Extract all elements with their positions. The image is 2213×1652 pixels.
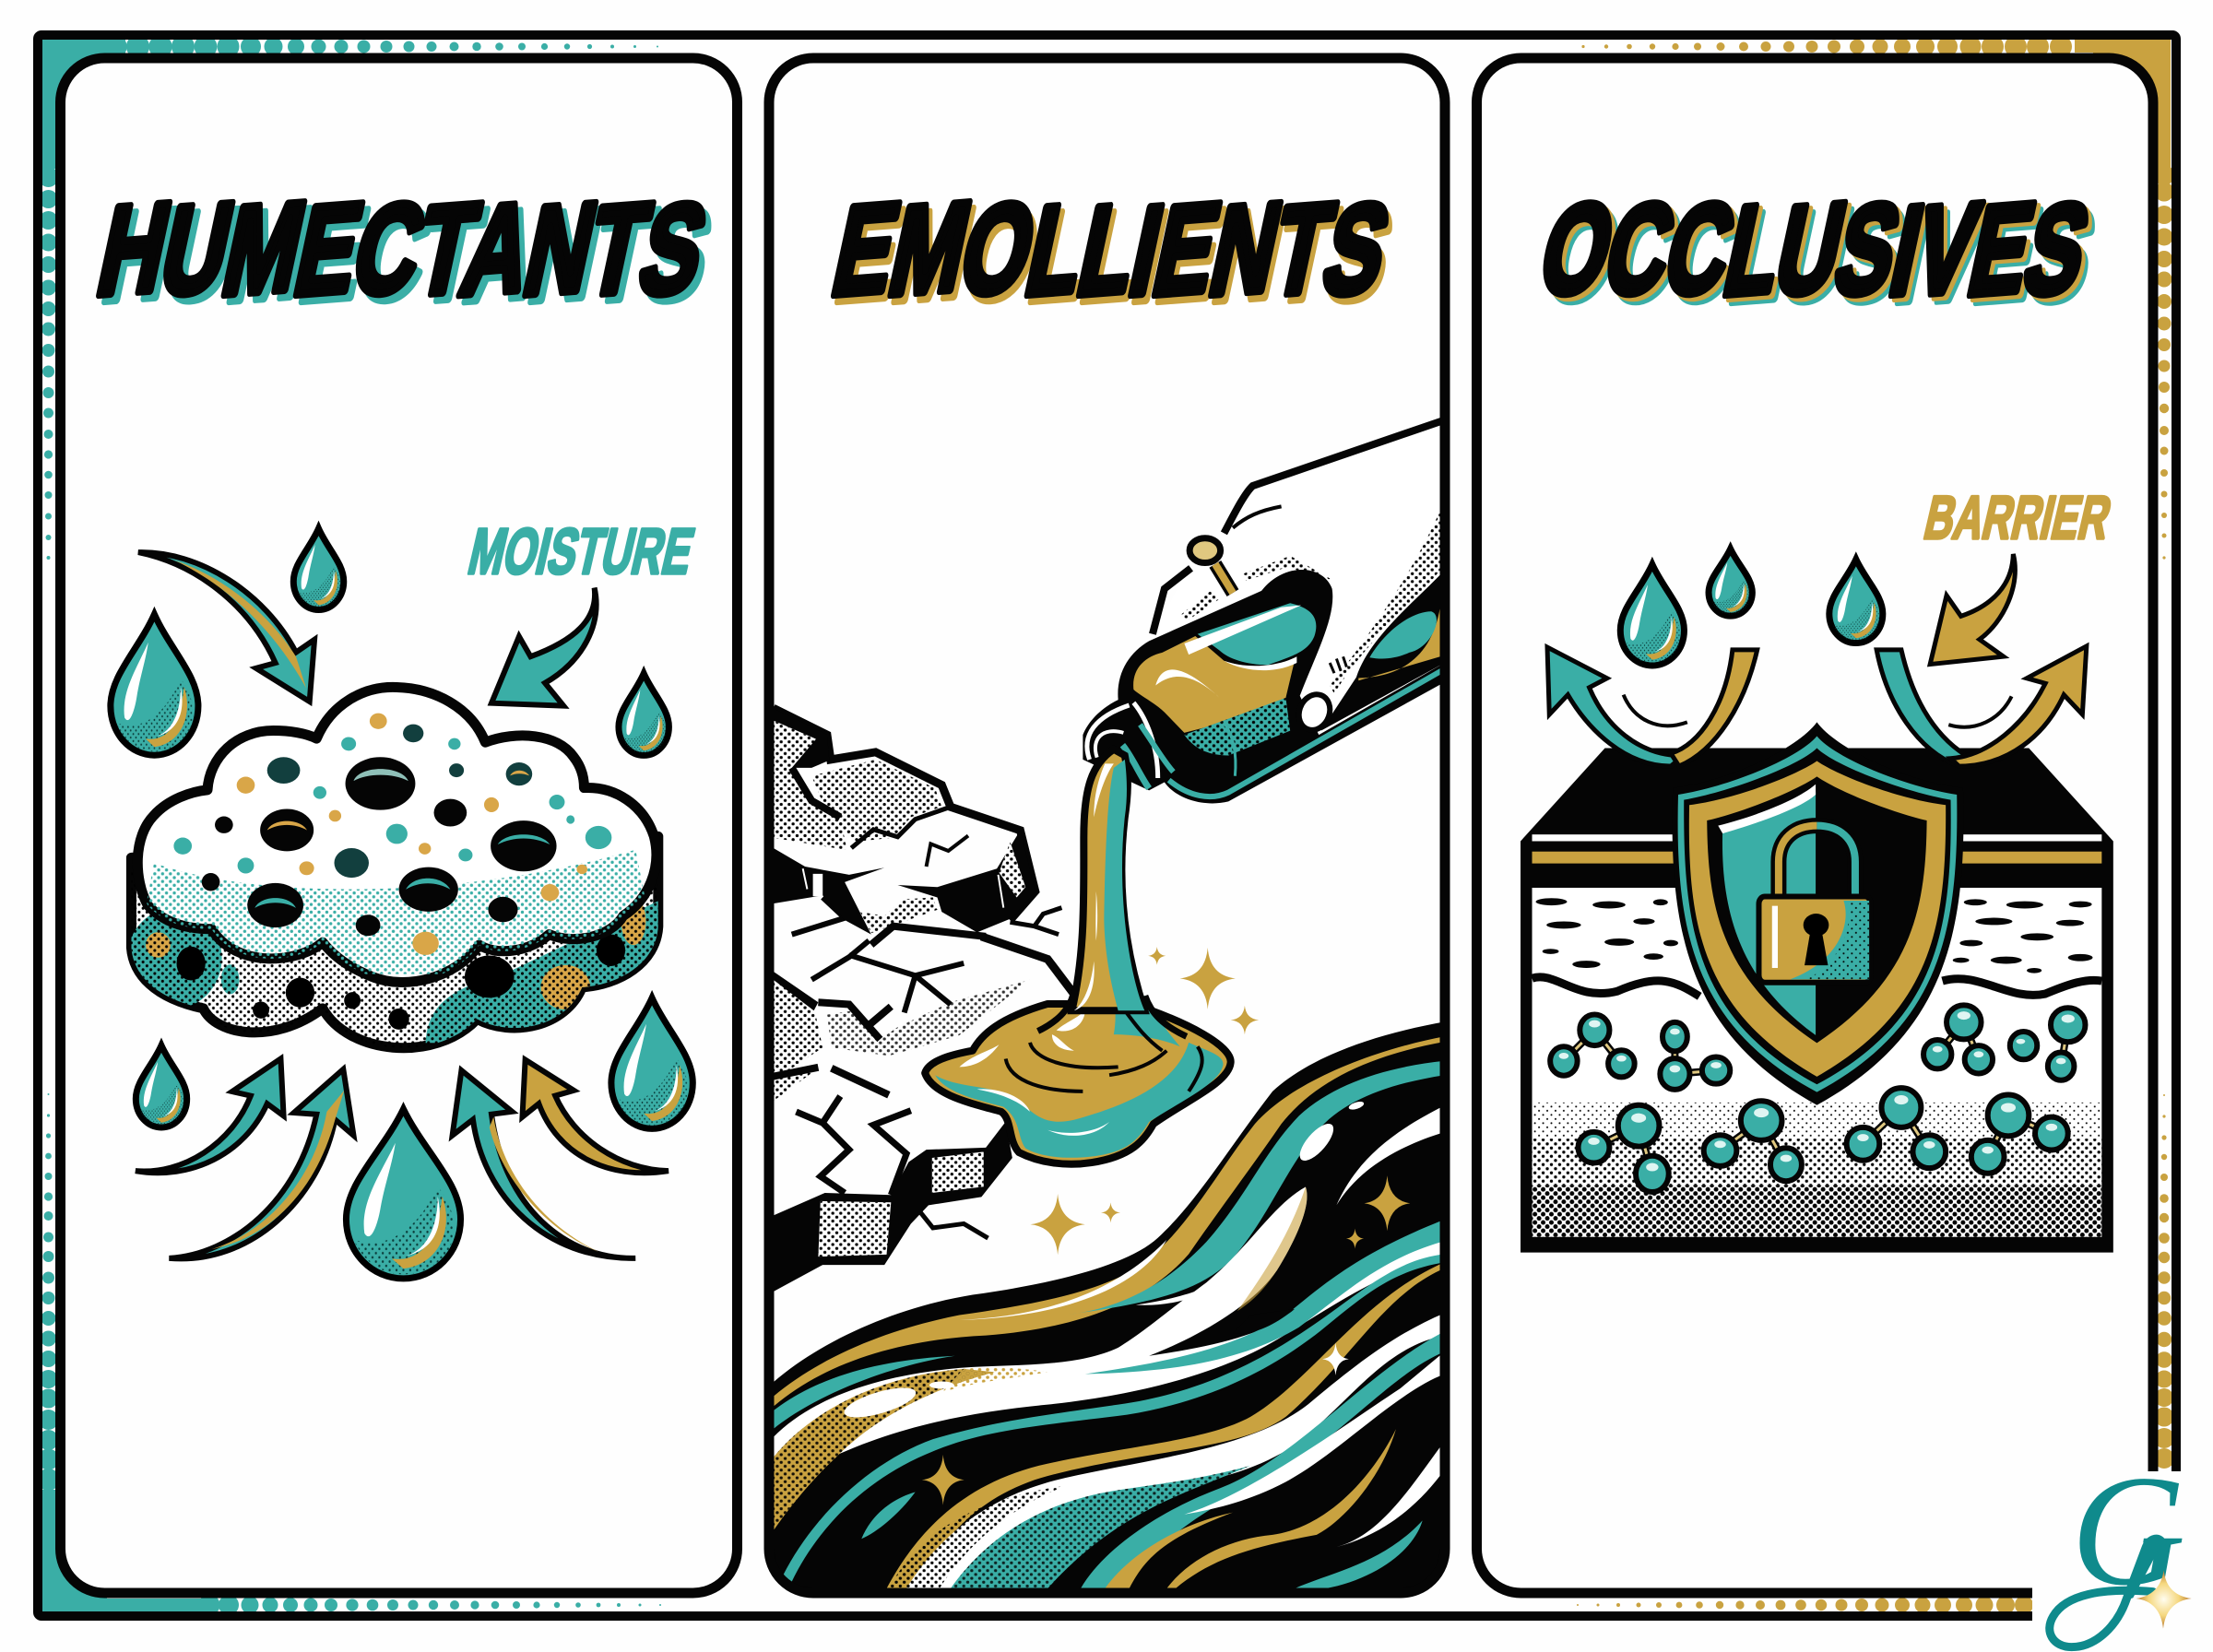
icon: sponge	[127, 687, 660, 1064]
cracked dry skin	[761, 708, 1074, 1302]
icon: drop right small	[619, 674, 669, 755]
puddle of emollient	[925, 996, 1231, 1164]
label: barrier: BARRIER	[1919, 484, 2117, 552]
icon: drop left	[1620, 564, 1684, 666]
icon: drop lower left small	[136, 1045, 187, 1127]
heading: emollients: EMOLLIENTS	[821, 183, 1409, 329]
icon: thumb	[1302, 691, 1333, 732]
icon: bottle	[1083, 570, 1445, 803]
icon: padlock	[1758, 826, 1871, 983]
icon: drop top center	[293, 528, 344, 609]
heading: humectants: HUMECTANTS	[82, 174, 723, 323]
icon: drop lower center	[346, 1109, 461, 1279]
hand holding bottle	[1071, 418, 1445, 1034]
heading: humectants: HUMECTANTS	[88, 181, 728, 329]
pouring stream	[1071, 749, 1144, 1010]
arrow: right teal and gold curve	[1876, 646, 2087, 766]
label: moisture: MOISTURE	[463, 515, 701, 587]
sparkles on ribbons	[922, 1175, 1410, 1505]
panel: occlusives	[1477, 58, 2153, 1593]
flowing ribbons of emollient	[761, 1021, 1453, 1608]
logo badge	[2032, 1444, 2213, 1652]
bottle neck and mouth	[1087, 702, 1173, 788]
panel: emollients	[761, 58, 1453, 1608]
icon: drop lower right large	[611, 997, 692, 1128]
panel: humectants	[61, 58, 738, 1593]
skin cross-section	[1521, 748, 2113, 1253]
heading: occlusives: OCCLUSIVES	[1528, 179, 2109, 326]
icon: bottle cap	[1189, 538, 1233, 593]
inner curve marks	[1624, 695, 2012, 727]
arrow: upper left	[138, 552, 314, 702]
sparkles near stream	[1148, 947, 1259, 1034]
arrow: barrier pointer	[1930, 554, 2015, 665]
arrow: lower left inner	[169, 1069, 353, 1258]
arrow: lower right inner	[453, 1070, 635, 1258]
icon: drop right	[1829, 560, 1883, 643]
icon: drop left large	[111, 614, 198, 755]
icon: shield	[1673, 722, 1963, 1105]
arrow: left teal and gold curve	[1547, 647, 1757, 766]
molecules	[1550, 1005, 2085, 1192]
illustration: oil poured over cracked skin	[761, 418, 1453, 1608]
heading: occlusives: OCCLUSIVES	[1531, 183, 2112, 330]
icon: drop middle	[1709, 549, 1752, 616]
land front edge	[775, 1123, 1012, 1292]
heading: occlusives: OCCLUSIVES	[1524, 175, 2105, 323]
illustration: sponge absorbing moisture	[111, 528, 692, 1279]
arrow: upper right	[491, 588, 597, 706]
arrow: lower left outer	[136, 1058, 284, 1173]
illustration: skin barrier with shield	[1521, 549, 2113, 1253]
heading: emollients: EMOLLIENTS	[817, 176, 1405, 323]
arrow: lower right outer	[522, 1060, 669, 1173]
logo badge: G	[2071, 1444, 2185, 1619]
